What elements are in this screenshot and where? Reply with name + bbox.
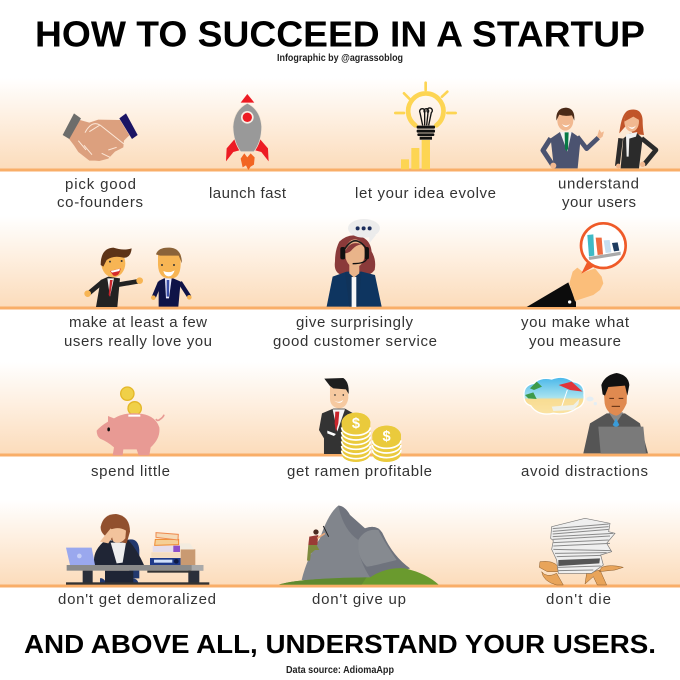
band: row 4 background xyxy=(0,500,680,588)
icon: handshake xyxy=(63,113,138,161)
icon: two smiling men xyxy=(84,248,192,307)
icon: man and woman xyxy=(543,108,656,169)
caption: understand your users: understand xyxy=(558,176,639,192)
icon: support agent with speech bubble xyxy=(327,219,382,307)
item: pick good co-founders xyxy=(57,113,143,211)
panel: row 3 xyxy=(0,362,680,480)
caption: pick good co-founders: pick good xyxy=(65,176,136,193)
caption: don't get demoralized: don't get demoralized xyxy=(58,591,216,608)
band: row 2 background xyxy=(0,216,680,310)
caption: understand your users xyxy=(558,176,639,211)
caption: you make what you measure: you make what xyxy=(521,314,630,331)
caption: spend little: spend little xyxy=(91,463,170,480)
item: launch fast xyxy=(209,94,287,202)
icon: businessman with coin stacks: $ xyxy=(352,416,360,432)
icon: person under paper stack xyxy=(539,518,623,585)
icon: businessman with coin stacks: $ xyxy=(383,429,391,445)
item: you make what you measure xyxy=(521,223,630,350)
item: get ramen profitable xyxy=(287,378,432,480)
closing statement: AND ABOVE ALL, UNDERSTAND YOUR USERS. xyxy=(24,629,656,659)
caption: you make what you measure xyxy=(521,314,630,350)
caption: you make what you measure: you measure xyxy=(529,333,621,350)
caption: get ramen profitable: get ramen profitable xyxy=(287,463,432,480)
panel: row 2 xyxy=(0,216,680,350)
caption: pick good co-founders xyxy=(57,176,143,211)
caption: give surprisingly good customer service: give surprisingly xyxy=(296,314,414,331)
item: don't get demoralized xyxy=(58,514,216,608)
item: avoid distractions xyxy=(521,373,648,480)
data source: Data source: AdiomaApp xyxy=(286,665,394,676)
item: don't die xyxy=(539,518,623,608)
item: give surprisingly good customer service xyxy=(273,219,437,350)
panel: row 4 xyxy=(0,500,680,608)
title: HOW TO SUCCEED IN A STARTUP xyxy=(35,14,645,54)
caption: let your idea evolve: let your idea evolve xyxy=(355,185,496,202)
icon: piggy bank with coins xyxy=(97,387,164,455)
band: row 1 background xyxy=(0,78,680,172)
item: spend little xyxy=(91,387,170,480)
band: row 3 background xyxy=(0,362,680,456)
caption: don't give up: don't give up xyxy=(312,591,406,608)
icon: light bulb with bars xyxy=(395,83,456,169)
icon: rocket xyxy=(226,94,269,170)
icon: demoralized woman at desk xyxy=(66,514,209,585)
caption: don't die: don't die xyxy=(546,591,611,608)
icon: businessman with coin stacks xyxy=(319,378,401,462)
caption: give surprisingly good customer service: good customer service xyxy=(273,333,437,350)
caption: make at least a few users really love you: make at least a few xyxy=(69,314,207,331)
caption: pick good co-founders: co-founders xyxy=(57,194,143,211)
icon: hand holding magnifier on chart xyxy=(527,223,626,307)
item: let your idea evolve xyxy=(355,83,496,202)
item: understand your users xyxy=(543,108,656,211)
icon: climber on mountain xyxy=(279,506,439,585)
subtitle: Infographic by @agrassoblog xyxy=(277,53,403,64)
item: make at least a few users really love you xyxy=(64,248,212,350)
item: don't give up xyxy=(279,506,439,608)
icon: man at laptop dreaming of beach xyxy=(524,373,648,454)
caption: avoid distractions: avoid distractions xyxy=(521,463,648,480)
caption: make at least a few users really love you xyxy=(64,314,212,350)
caption: understand your users: your users xyxy=(562,194,636,211)
caption: launch fast: launch fast xyxy=(209,185,287,202)
panel: row 1 xyxy=(0,78,680,211)
caption: give surprisingly good customer service xyxy=(273,314,437,350)
caption: make at least a few users really love you: users really love you xyxy=(64,333,212,350)
